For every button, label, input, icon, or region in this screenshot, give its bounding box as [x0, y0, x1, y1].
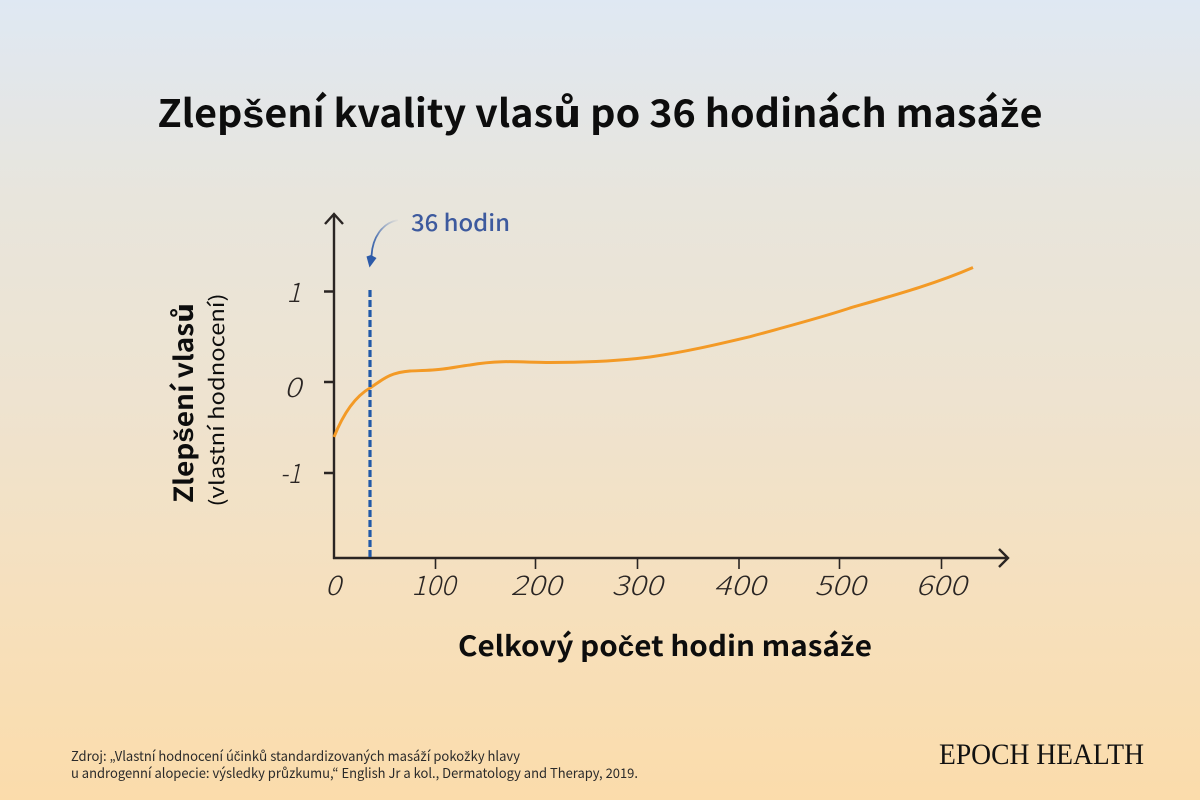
x tick labels: 400: [714, 564, 770, 603]
y tick labels: 1: [287, 271, 301, 310]
source: [71, 745, 638, 782]
x tick labels: 100: [412, 564, 459, 603]
axes: [324, 214, 1008, 569]
x tick labels: 300: [612, 564, 667, 603]
arrow to dashed line: [366, 220, 398, 268]
x tick labels: 0: [325, 564, 345, 603]
y axis title: [164, 294, 230, 506]
source: u androgenní alopecie: výsledky průzkumu,“ English Jr a kol., Dermatology and Therapy, 2019.: [71, 762, 638, 782]
y tick labels: [280, 271, 305, 491]
title: Zlepšení kvality vlasů po 36 hodinách masá že: [158, 83, 1043, 138]
logo: EPOCH HEALTH: [939, 738, 1144, 771]
y tick labels: 0: [284, 366, 305, 405]
y axis title: Zlepšení vlasů: [164, 303, 201, 503]
36 hour dashed line: [368, 290, 372, 558]
orange curve: [334, 268, 973, 437]
source: Zdroj: „Vlastní hodnocení účinků standardizovaných masáží pokožky hlavy: [71, 745, 520, 765]
x tick labels: 200: [510, 564, 566, 603]
x tick labels: 600: [916, 564, 971, 603]
x axis title: Celkový po čet hodin masá že: [458, 625, 872, 665]
36 hours label: 36 hodin: [411, 204, 510, 238]
y axis title: (vlastní hodnocení): [201, 294, 230, 506]
y tick labels: -1: [280, 452, 301, 491]
x tick labels: [325, 564, 971, 603]
x tick labels: 500: [814, 564, 870, 603]
